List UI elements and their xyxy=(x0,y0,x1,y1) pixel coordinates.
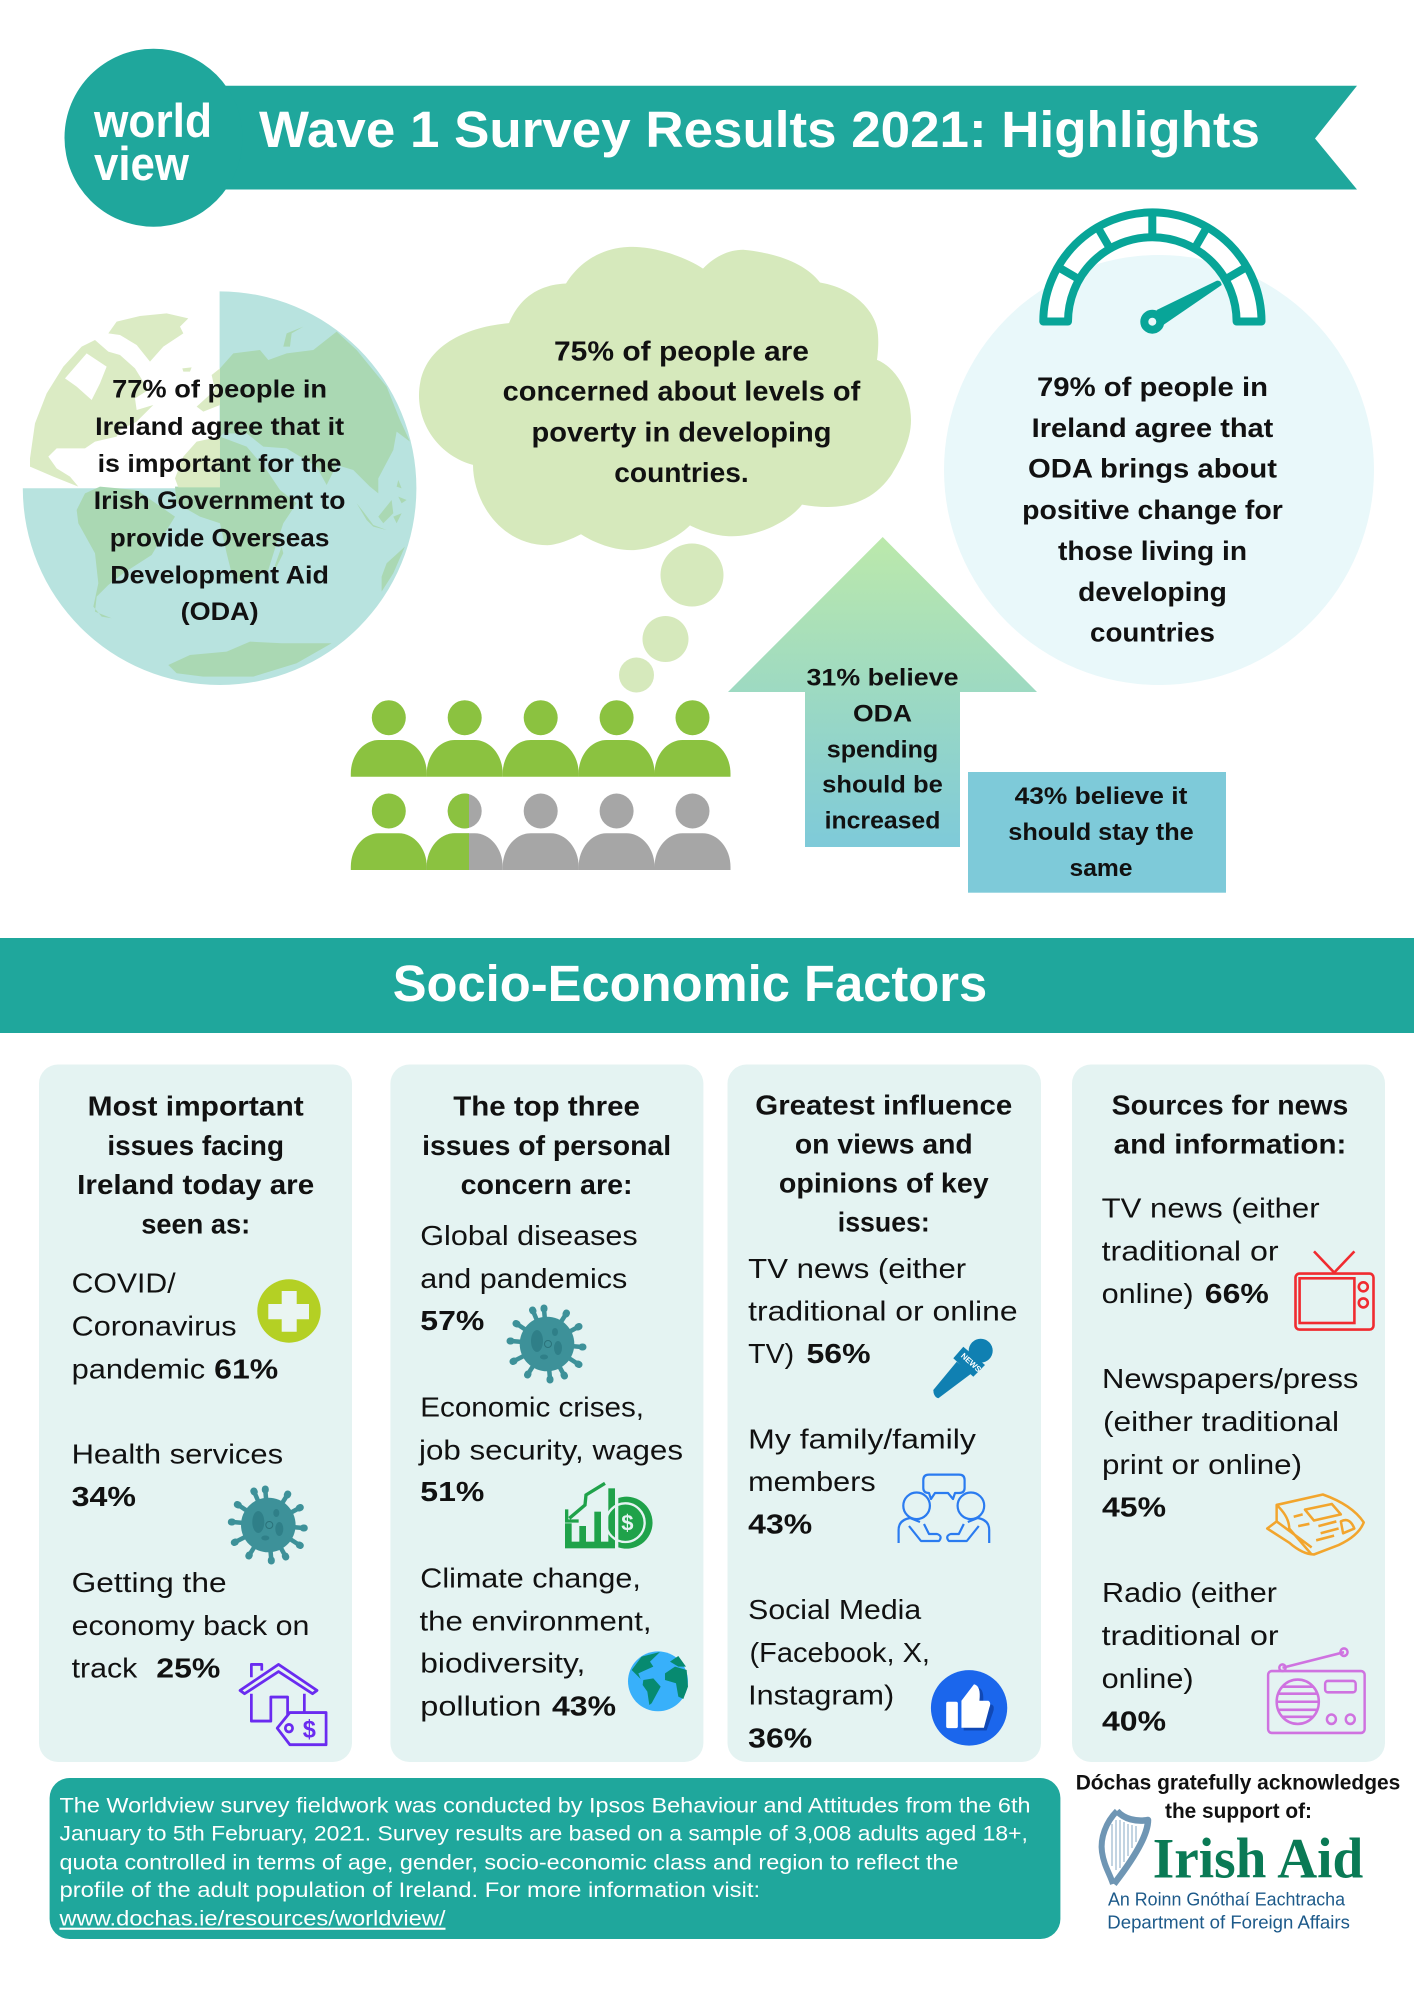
box: 43% stay the same xyxy=(968,772,1226,893)
cloud text: countries. xyxy=(614,457,749,488)
circle text: those living in xyxy=(1058,536,1247,566)
item: social media xyxy=(748,1594,930,1753)
icon: news microphone xyxy=(933,1339,993,1398)
globe quadrants xyxy=(23,291,416,685)
item: family: My family/family xyxy=(748,1424,976,1455)
globe text: provide Overseas xyxy=(110,524,329,552)
box text xyxy=(1008,783,1194,882)
acknowledgement text xyxy=(1076,1771,1400,1823)
item: health services xyxy=(72,1439,283,1512)
icon: earth xyxy=(628,1651,688,1711)
row 2 xyxy=(351,794,730,870)
globe text: 77% of people in xyxy=(112,376,327,404)
icon: television xyxy=(1296,1251,1374,1330)
item: climate: the environment, xyxy=(420,1605,652,1636)
cloud text: poverty in developing xyxy=(532,416,832,448)
thought cloud: 75% xyxy=(419,247,911,693)
section heading: Socio-Economic Factors xyxy=(393,955,987,1012)
department text: Department of Foreign Affairs xyxy=(1107,1911,1350,1932)
arrow text xyxy=(806,664,958,835)
acknowledgement and Irish Aid logo xyxy=(1076,1771,1400,1932)
item: climate: pollution xyxy=(420,1690,541,1721)
item: newspapers xyxy=(1102,1363,1358,1523)
panel heading: opinions of key xyxy=(779,1167,989,1198)
item: social media: (Facebook, X, xyxy=(750,1637,930,1668)
box text: same xyxy=(1070,855,1132,882)
panel heading: on views and xyxy=(795,1129,973,1160)
panel heading xyxy=(1112,1090,1348,1160)
panel heading xyxy=(422,1090,671,1200)
arrow text: increased xyxy=(825,808,940,835)
panel background xyxy=(728,1064,1041,1762)
item: tv news: traditional or xyxy=(1102,1235,1279,1266)
item: social media: Instagram) xyxy=(748,1679,894,1710)
panel heading: The top three xyxy=(453,1090,640,1122)
item: tv news xyxy=(748,1253,1018,1369)
item: newspapers: (either traditional xyxy=(1103,1406,1339,1437)
icon: people talking xyxy=(899,1475,989,1543)
item: covid: COVID/ xyxy=(72,1267,176,1298)
icon: chart and coin: $ xyxy=(621,1511,633,1536)
circle text: 79% of people in xyxy=(1037,372,1268,402)
item: family: 43% xyxy=(748,1509,812,1540)
panel: sources for news xyxy=(1072,1064,1385,1762)
arrow text: ODA xyxy=(853,701,912,728)
logo circle: view xyxy=(94,137,189,190)
icon: house with price tag: $ xyxy=(303,1716,316,1744)
item: radio xyxy=(1102,1577,1279,1736)
panel heading: and information: xyxy=(1114,1129,1346,1160)
icon: virus xyxy=(510,1308,583,1380)
item: economic crises: job security, wages xyxy=(418,1434,683,1466)
item: tv news: TV) xyxy=(748,1338,794,1369)
box text: should stay the xyxy=(1008,819,1194,846)
item: economic crises: 51% xyxy=(420,1476,484,1507)
panel background xyxy=(1072,1064,1385,1762)
globe text: Irish Government to xyxy=(94,487,345,515)
item: tv news xyxy=(1102,1192,1320,1309)
globe text xyxy=(94,376,345,626)
item: health services: Health services xyxy=(72,1439,283,1470)
globe text: Ireland agree that it xyxy=(95,413,345,441)
panel: most important issues xyxy=(39,1064,352,1762)
item: social media: Social Media xyxy=(748,1594,922,1625)
item: radio: 40% xyxy=(1102,1705,1166,1736)
item: economy: track xyxy=(72,1652,138,1684)
pictogram: people 75% xyxy=(351,700,730,870)
item: covid: 61% xyxy=(214,1353,278,1384)
arrow text: should be xyxy=(822,772,943,799)
globe panel: 77% xyxy=(23,291,416,685)
panel heading: seen as: xyxy=(141,1208,250,1239)
Irish Aid wordmark: Irish Aid xyxy=(1153,1827,1364,1890)
footer methodology note xyxy=(50,1778,1060,1939)
circle text: countries xyxy=(1090,618,1215,648)
item: pandemics xyxy=(420,1220,638,1336)
band background xyxy=(0,938,1414,1033)
item: radio: Radio (either xyxy=(1102,1577,1277,1608)
item: pandemics: 57% xyxy=(420,1305,484,1336)
globe text: (ODA) xyxy=(181,598,259,626)
panel heading: issues of personal xyxy=(422,1130,671,1161)
up arrow shape xyxy=(728,537,1037,847)
item: radio: traditional or xyxy=(1102,1620,1279,1651)
item: economic crises xyxy=(418,1392,683,1507)
item: economy xyxy=(72,1567,309,1684)
item: tv news: 66% xyxy=(1205,1278,1269,1309)
icon: harp xyxy=(1102,1811,1148,1884)
item: climate: 43% xyxy=(552,1690,616,1721)
icon: radio xyxy=(1268,1648,1365,1733)
item: social media: 36% xyxy=(748,1722,812,1753)
logo circle: world xyxy=(93,94,212,147)
item: covid xyxy=(72,1267,278,1384)
item: tv news: online) xyxy=(1102,1278,1194,1309)
panel heading xyxy=(755,1090,1012,1238)
item: tv news: 56% xyxy=(806,1338,870,1369)
department text xyxy=(1107,1889,1350,1932)
item: economic crises: Economic crises, xyxy=(420,1392,644,1422)
acknowledgement text: the support of: xyxy=(1165,1800,1312,1823)
icon: newspaper xyxy=(1267,1495,1364,1554)
row 1 xyxy=(351,700,730,777)
circle text: developing xyxy=(1078,577,1227,607)
note text: quota controlled in terms of age, gender, socio-economic class and region to reflect the xyxy=(60,1851,959,1874)
item: economy: 25% xyxy=(156,1652,220,1684)
item: newspapers: print or online) xyxy=(1102,1449,1302,1480)
panel heading: Sources for news xyxy=(1112,1090,1348,1120)
panel heading: Ireland today are xyxy=(77,1169,314,1200)
circle text: positive change for xyxy=(1022,495,1283,525)
panel: top three personal concerns xyxy=(390,1064,703,1762)
item: tv news: traditional or online xyxy=(748,1296,1018,1327)
note text: January to 5th February, 2021. Survey results are based on a sample of 3,008 adults aged 18+, xyxy=(60,1822,1028,1845)
globe text: Development Aid xyxy=(110,562,329,590)
item: economy: Getting the xyxy=(72,1567,227,1598)
icon: chart and coin xyxy=(565,1483,653,1549)
item: climate: Climate change, xyxy=(420,1562,641,1593)
item: economy: economy back on xyxy=(72,1610,309,1641)
header banner xyxy=(64,49,1357,227)
note text: profile of the adult population of Ireland. For more information visit: xyxy=(60,1879,760,1902)
item: tv news: TV news (either xyxy=(1102,1192,1320,1223)
panel: greatest influence xyxy=(728,1064,1041,1762)
light circle xyxy=(944,255,1374,685)
item: family xyxy=(748,1424,976,1540)
icon: thumbs up xyxy=(931,1670,1007,1746)
item: newspapers: Newspapers/press xyxy=(1102,1363,1358,1394)
panel heading: Most important xyxy=(88,1090,304,1122)
thought bubbles xyxy=(619,544,724,692)
item: newspapers: 45% xyxy=(1102,1492,1166,1523)
panel background xyxy=(390,1064,703,1762)
panel background xyxy=(39,1064,352,1762)
circle text: ODA brings about xyxy=(1028,454,1277,484)
note background xyxy=(50,1778,1060,1939)
item: tv news: TV news (either xyxy=(748,1253,966,1284)
icon: virus xyxy=(231,1489,304,1561)
item: radio: online) xyxy=(1102,1663,1194,1694)
item: family: members xyxy=(748,1466,876,1497)
cloud text xyxy=(503,336,861,488)
item: covid: pandemic xyxy=(72,1353,205,1384)
note text: The Worldview survey fieldwork was conducted by Ipsos Behaviour and Attitudes from the 6th xyxy=(60,1795,1030,1818)
arrow text: spending xyxy=(827,736,938,763)
circle text: Ireland agree that xyxy=(1032,413,1274,443)
item: covid: Coronavirus xyxy=(72,1310,237,1341)
continents xyxy=(30,313,410,677)
circle panel: 79% xyxy=(944,212,1374,685)
panel heading: issues facing xyxy=(107,1130,284,1161)
item: pandemics: and pandemics xyxy=(420,1263,627,1294)
panel heading xyxy=(77,1090,314,1239)
note text xyxy=(58,1795,1031,1931)
panel heading: issues: xyxy=(838,1206,930,1238)
acknowledgement text: Dóchas gratefully acknowledges xyxy=(1076,1771,1400,1794)
panel heading: Greatest influence xyxy=(755,1090,1012,1120)
arrow text: 31% believe xyxy=(806,664,958,691)
arrow: 31% increased xyxy=(728,537,1037,847)
circle text xyxy=(1022,372,1283,648)
logo circle xyxy=(64,49,242,227)
icon: speedometer gauge xyxy=(1043,212,1262,330)
department text: An Roinn Gnóthaí Eachtracha xyxy=(1108,1889,1346,1910)
globe text: is important for the xyxy=(98,450,342,478)
panel heading: concern are: xyxy=(461,1169,633,1200)
cloud shape xyxy=(419,247,911,550)
section band xyxy=(0,938,1414,1033)
box background xyxy=(968,772,1226,893)
item: pandemics: Global diseases xyxy=(420,1220,638,1251)
note text: www.dochas.ie/resources/worldview/ xyxy=(58,1908,446,1931)
ribbon xyxy=(150,86,1357,190)
box text: 43% believe it xyxy=(1015,783,1187,810)
icon: house with price tag xyxy=(240,1664,326,1745)
title: Wave 1 Survey Results 2021: Highlights xyxy=(259,101,1260,158)
cloud text: concerned about levels of xyxy=(503,376,861,406)
cloud text: 75% of people are xyxy=(554,336,809,366)
icon: medical cross xyxy=(257,1279,321,1343)
icon: news microphone: NEWS xyxy=(959,1351,983,1374)
item: health services: 34% xyxy=(72,1481,136,1512)
item: climate xyxy=(420,1562,652,1721)
item: climate: biodiversity, xyxy=(420,1647,585,1678)
